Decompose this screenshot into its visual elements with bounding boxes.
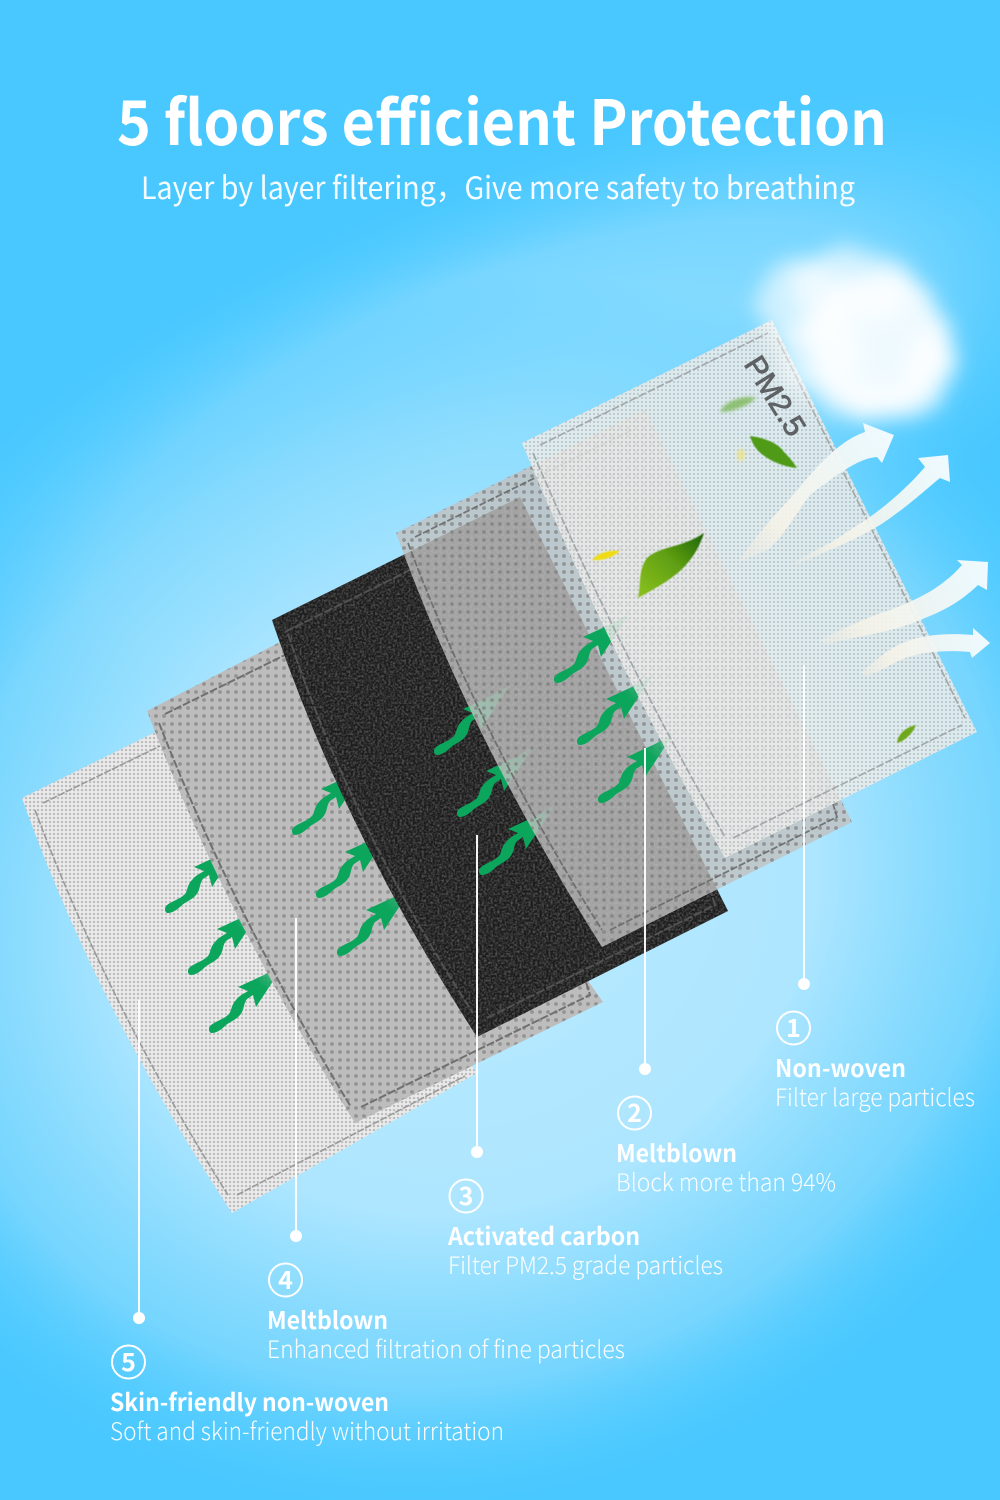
callout 4: meltblown <box>267 1261 625 1365</box>
callout 3: activated carbon: 3 <box>459 1177 473 1213</box>
callout 1: non-woven: Non-woven <box>775 1049 906 1084</box>
callout 2: meltblown <box>616 1094 836 1198</box>
leaf: faint blurred <box>720 397 756 412</box>
callout 2: meltblown: Block more than 94% <box>616 1163 836 1198</box>
callout 5: skin-friendly non-woven: Soft and skin-friendly without irritation <box>110 1412 504 1447</box>
pointer line 1 <box>798 665 810 990</box>
callout 4: meltblown: Meltblown <box>267 1301 388 1336</box>
white airflow arrow 4 <box>860 628 990 676</box>
layer 5: skin-friendly non-woven <box>22 710 477 1213</box>
title: 5 floors efficient Protection <box>117 73 887 163</box>
layer 1: non-woven <box>522 320 977 858</box>
white airflow arrow 3 <box>818 560 988 644</box>
callout 1: non-woven: 1 <box>786 1009 801 1045</box>
pointer line 5 <box>133 1000 145 1324</box>
green airflow arrows through layer 4 <box>292 765 413 956</box>
leaf: yellow <box>592 551 620 560</box>
leaf: large green <box>638 533 704 598</box>
white airflow arrow 2 <box>793 455 950 563</box>
pointer line 2 <box>639 748 651 1075</box>
callout 3: activated carbon <box>447 1177 723 1281</box>
layer 4: meltblown <box>147 616 603 1123</box>
callout 3: activated carbon: Filter PM2.5 grade particles <box>448 1246 723 1281</box>
callout 3: activated carbon: Activated carbon <box>447 1217 640 1252</box>
PM2.5 print: PM2.5 <box>737 350 812 442</box>
callout 1: non-woven <box>775 1009 975 1113</box>
callout 5: skin-friendly non-woven: Skin-friendly non-woven <box>110 1383 389 1418</box>
leaf: lower right green <box>897 725 916 743</box>
pointer line 4 <box>290 918 302 1242</box>
callout 2: meltblown: Meltblown <box>616 1134 737 1169</box>
layer 3: activated carbon <box>260 490 740 1050</box>
leaf: small green <box>750 436 797 468</box>
green airflow arrows through layer 2 <box>554 613 674 803</box>
subtitle: Layer by layer filtering，Give more safety to breathing <box>141 163 855 208</box>
callout 5: skin-friendly non-woven: 5 <box>121 1343 136 1379</box>
callout 2: meltblown: 2 <box>627 1094 642 1130</box>
green airflow arrows through layer 3 <box>434 685 555 875</box>
green airflow arrows through layer 5 <box>165 843 285 1033</box>
layer 2: meltblown <box>396 409 852 947</box>
callout 4: meltblown: Enhanced filtration of fine particles <box>267 1330 625 1365</box>
callout 5: skin-friendly non-woven <box>110 1343 504 1447</box>
leaf: faint yellow <box>737 449 745 461</box>
callout 1: non-woven: Filter large particles <box>775 1078 975 1113</box>
cloud <box>756 245 956 422</box>
white airflow arrow 1 <box>737 423 894 563</box>
pointer line 3 <box>471 835 483 1158</box>
callout 4: meltblown: 4 <box>278 1261 293 1297</box>
